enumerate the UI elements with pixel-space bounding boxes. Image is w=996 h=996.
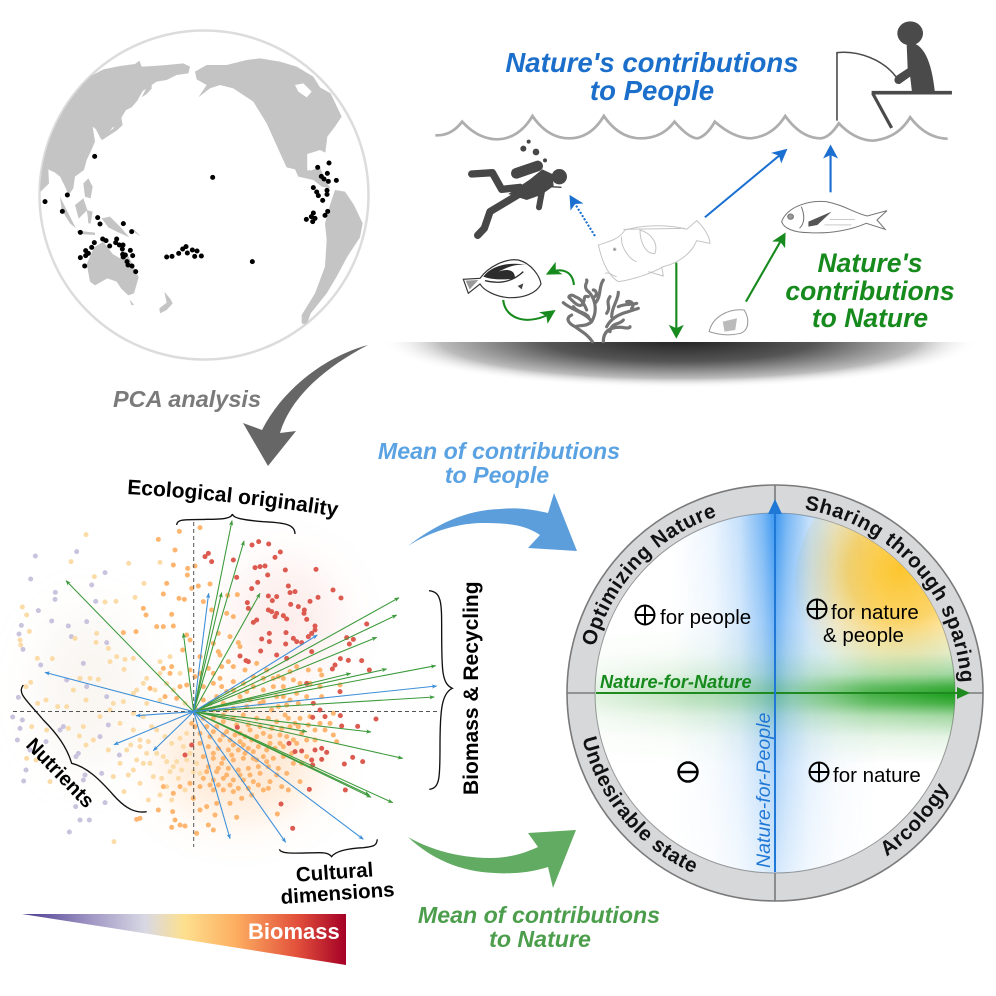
quadrant: undesirable minus [678,762,698,782]
icon: coral [563,280,638,342]
label: Nature-for-Nature: Nature-for-Nature [600,672,752,692]
quadrant: for nature and people: for nature [831,601,919,624]
ring label: Sharing through sparing: Sharing through sparing [806,496,972,682]
seabed shadow [401,342,958,384]
ring outlines [567,485,983,901]
panel: world map globe [37,30,368,360]
brace: ecological originality [177,514,295,534]
axis: nature for people [768,499,782,872]
axis: nature for nature [596,687,970,699]
heading: Nature's contributions to People: to People [590,75,714,106]
gradient field: orange, blue and green [595,513,955,873]
icon: parrotfish [598,221,710,282]
map: land masses [37,58,363,325]
label: PCA analysis: PCA analysis [113,386,261,412]
label: Cultural dimensions: Cultural [295,858,374,887]
label: Nature-for-People: Nature-for-People [753,713,775,868]
label: Biomass & Recycling: Biomass & Recycling [460,581,483,795]
map: Hudson Bay and Gulf of Mexico water [295,83,327,171]
globe circle [40,30,368,360]
label: Nutrients: Nutrients [21,734,98,813]
brace: nutrients [21,685,147,812]
quadrant: for nature and people: & people [823,624,904,647]
ring label: Optimizing Nature: Optimizing Nature [582,507,716,644]
map: study site dots [45,156,336,272]
icon: scuba diver [472,140,567,235]
icon: blue tang fish [463,260,541,298]
label: Mean of contributions to Nature: Mean of contributions [418,902,660,928]
scatter density: soft colour wash [35,560,340,820]
quadrant: for nature and people [808,600,919,647]
scatter points: orange mid biomass [123,528,340,833]
label: Ecological originality: Ecological originality [128,480,339,520]
heading: Nature's contributions to Nature: contributions [785,276,955,306]
scatter points: purple low biomass [13,552,119,832]
chart: PCA scatter with loadings [10,480,483,909]
ring label: Arcology: Arcology [882,782,948,856]
label: Biomass: Biomass [248,919,340,944]
arrow: PCA analysis [243,345,368,466]
arrows: contributions to nature [503,235,784,336]
label: Mean of contributions to People: Mean of contributions [378,438,620,464]
ring label: Undesirable state: Undesirable state [584,736,696,872]
axis lines [13,522,437,847]
heading: Nature's contributions to People: Nature's contributions [505,47,799,78]
scatter points: red high biomass [185,542,376,828]
label: Mean of contributions to Nature: to Nature [489,926,591,952]
scatter points: pale yellow and grey [20,535,200,842]
loading arrows: people [45,593,437,842]
label: Mean of contributions to People: to People [445,462,549,488]
panel: ecosystem scene [380,21,980,390]
heading: Nature's contributions to Nature: Nature's [818,248,922,278]
heading: Nature's contributions to Nature: to Nature [812,303,928,333]
brace: biomass and recycling [429,591,452,789]
quadrant: for people: for people [660,606,751,629]
loading arrows: nature [66,521,436,803]
label: Cultural dimensions: dimensions [280,878,395,909]
icon: butterfly fish [709,310,748,335]
arrow: mean to people [408,493,577,551]
icon: fisherman [837,21,952,128]
arrow: mean to nature [408,830,576,888]
icon: sea bream fish [782,201,887,233]
panel: compass diagram [566,484,984,902]
brace: cultural dimensions [279,839,377,857]
legend: biomass gradient wedge [22,914,346,965]
waves [435,116,948,141]
arrows: contributions to people [571,147,831,236]
label: Cultural dimensions [280,858,395,909]
quadrant: for nature: for nature [833,764,921,787]
outer ring [581,499,969,887]
